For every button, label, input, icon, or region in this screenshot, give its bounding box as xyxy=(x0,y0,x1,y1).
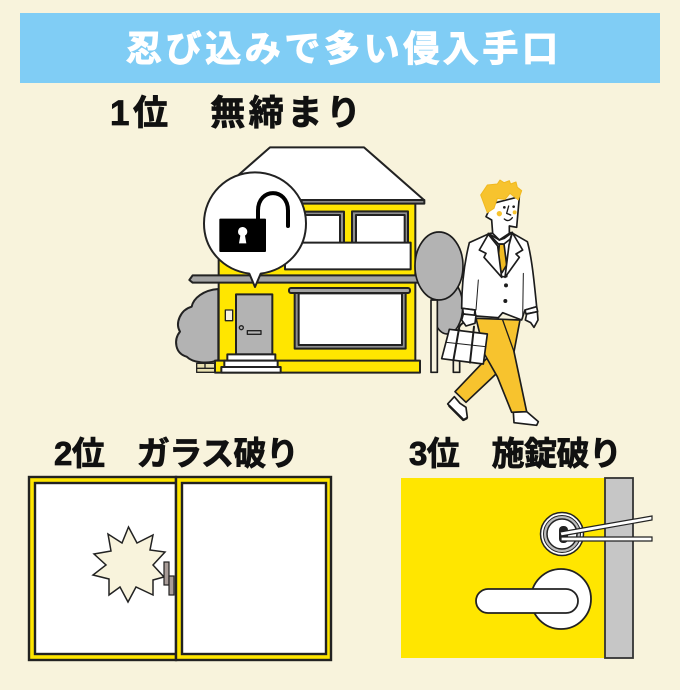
lever handle xyxy=(476,569,591,629)
title banner: 忍び込みで多い侵入手口 xyxy=(126,28,558,69)
door panel xyxy=(401,478,605,658)
bag xyxy=(442,329,487,364)
face features xyxy=(504,206,512,221)
neck and face xyxy=(486,197,519,240)
bush xyxy=(176,289,218,362)
broken glass hole xyxy=(93,527,165,602)
door frame xyxy=(605,478,633,658)
upper left window xyxy=(297,212,344,245)
back tree xyxy=(432,279,463,334)
illustration: broken window xyxy=(29,477,331,660)
back shoe xyxy=(448,397,467,420)
roof underside xyxy=(302,200,424,204)
lower window xyxy=(295,293,406,349)
brick base xyxy=(197,363,215,372)
front tree xyxy=(415,232,463,300)
right sash xyxy=(176,477,331,660)
illustration: walking man with tree xyxy=(415,180,538,425)
heading: rank 1: 1位 無締まり xyxy=(110,94,361,133)
front shoe xyxy=(513,412,538,425)
intercom xyxy=(225,310,233,321)
illustration: house with unlocked bubble xyxy=(176,147,425,373)
heading: rank 2: 2位 ガラス破り xyxy=(54,435,299,472)
upper right window xyxy=(352,211,408,245)
steps xyxy=(227,354,275,361)
lapels xyxy=(479,234,502,277)
hair xyxy=(481,180,522,213)
buttons xyxy=(504,283,508,287)
tie xyxy=(498,244,507,273)
front leg xyxy=(476,318,527,412)
illustration: door lock being picked xyxy=(401,478,652,658)
lower window awning xyxy=(289,288,410,293)
speech bubble xyxy=(204,172,306,287)
jacket xyxy=(462,233,537,320)
roof xyxy=(210,147,424,200)
hands and cuffs xyxy=(463,308,475,316)
shirt collar xyxy=(490,233,512,277)
house wall xyxy=(219,203,415,362)
left sash xyxy=(29,477,176,660)
back leg xyxy=(455,357,496,402)
eave xyxy=(189,275,425,283)
lock picks xyxy=(560,516,652,541)
cheeks xyxy=(497,211,502,216)
open padlock xyxy=(219,193,288,252)
foundation xyxy=(215,361,420,373)
heading: rank 3: 3位 施錠破り xyxy=(409,435,622,472)
key cylinder xyxy=(540,512,584,556)
crescent lock xyxy=(164,562,169,585)
door xyxy=(236,294,272,354)
title banner xyxy=(20,13,660,83)
balcony xyxy=(285,243,411,269)
